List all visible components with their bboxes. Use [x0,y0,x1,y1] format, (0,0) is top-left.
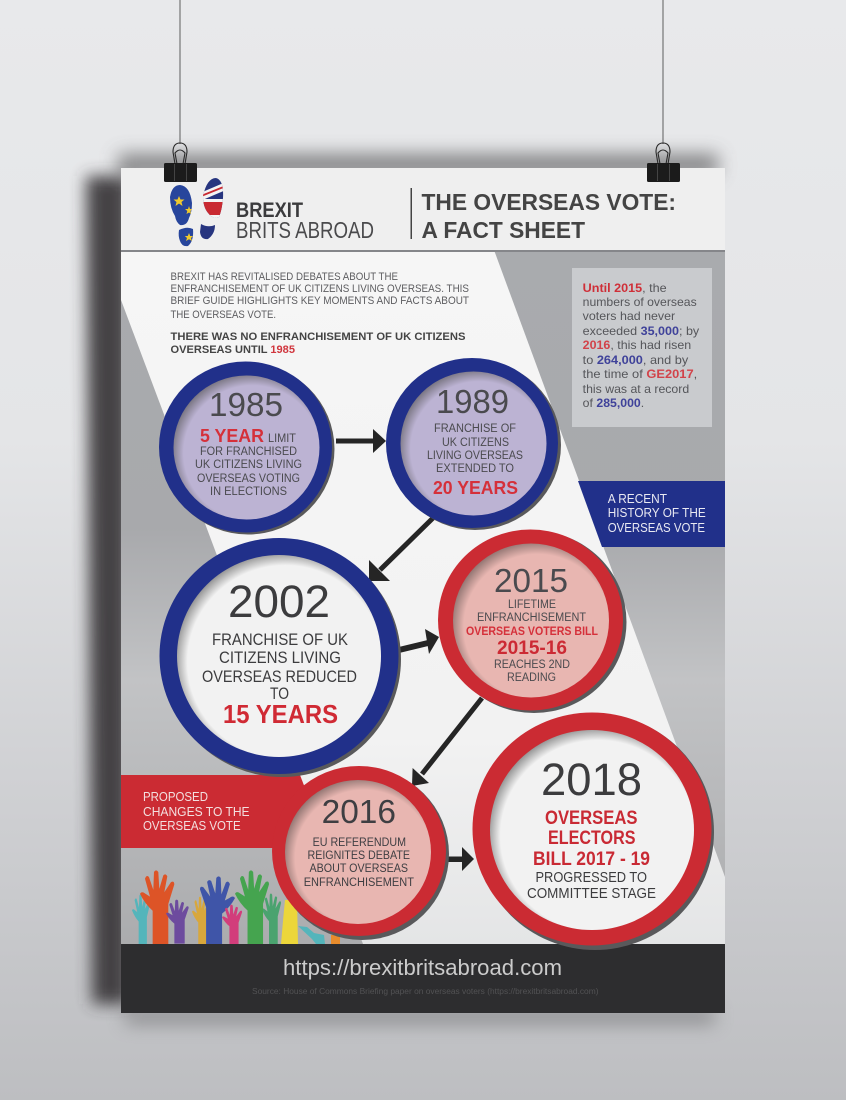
circle: 2016: ABOUT OVERSEAS [310,863,408,875]
circle: 1985: IN ELECTIONS [210,486,287,498]
intro text: BRIEF GUIDE HIGHLIGHTS KEY MOMENTS AND FACTS ABOUT [170,295,469,307]
circle: 2018: ELECTORS [548,828,636,849]
banner: a recent history [578,481,725,547]
circle: 2002 [160,538,401,777]
intro bold statement: OVERSEAS UNTIL 1985 [170,344,295,356]
circle: 2015: 2015-16 [497,638,567,659]
circle: 2018: OVERSEAS [545,808,638,829]
header divider [410,188,412,239]
callout: overseas voter numbers: the time of GE2017 , [583,367,697,381]
circle: 1989: EXTENDED TO [436,463,514,475]
poster body [121,168,725,1013]
circle: 2016: ENFRANCHISEMENT [304,877,414,889]
circle: 2015: 2015 [494,562,568,599]
arrow: 2016 to 2018 [448,847,474,871]
callout: overseas voter numbers: Until 2015, the [583,281,667,295]
logo wordmark: BRITS ABROAD [236,217,374,243]
banner: a recent history: A RECENT [608,492,667,506]
arrow: 1989 to 2002 [369,518,433,581]
icon: left clip [164,143,197,182]
circle: 2018 [472,712,714,950]
title [422,189,676,243]
circle: 2015: LIFETIME [508,599,556,611]
intro text [170,271,469,321]
footer band [121,944,725,1013]
circle: 2018: 2018 [541,754,642,805]
circle: 2002: 15 YEARS [223,699,338,729]
circle: 1989: LIVING OVERSEAS [427,450,523,462]
callout: overseas voter numbers: to 264,000, and by [583,353,688,367]
banner: a recent history: OVERSEAS VOTE [608,521,705,535]
arrow: 2015 to 2016 [412,698,482,786]
title: THE OVERSEAS VOTE: [422,189,676,215]
circle: 2015 [438,530,626,713]
circle: 2018: COMMITTEE STAGE [527,885,656,902]
logo: brexit footprints [170,176,226,246]
circle: 2002: 2002 [228,576,330,627]
circle: 1989 [386,358,561,530]
intro text: ENFRANCHISEMENT OF UK CITIZENS LIVING OVERSEAS. THIS [170,283,469,295]
circle: 1989: FRANCHISE OF [434,423,516,435]
logo wordmark [236,198,374,243]
circle: 1985: UK CITIZENS LIVING [195,459,302,471]
header band [121,168,725,252]
circle: 1985 [159,362,334,534]
circle: 1989: 20 YEARS [433,478,518,498]
intro bold statement [170,331,466,356]
circle: 2002: TO [270,685,289,703]
poster shadow [86,154,718,1024]
circle: 2015: REACHES 2ND [494,659,570,671]
callout: overseas voter numbers: 2016, this had risen [583,338,691,352]
circle: 1985: FOR FRANCHISED [200,446,297,458]
circle: 1985: 1985 [209,386,283,423]
circle: 2002: OVERSEAS REDUCED [202,668,357,686]
circle: 1985: OVERSEAS VOTING [197,473,300,485]
circle: 2016: EU REFERENDUM [313,837,406,849]
circle: 2016: REIGNITES DEBATE [308,850,410,862]
illustration: raised hands [132,870,340,945]
circle: 2016: 2016 [322,793,396,830]
callout: overseas voter numbers: numbers of overseas [583,295,697,309]
banner: proposed changes: PROPOSED [143,790,208,804]
callout: overseas voter numbers: voters had never [583,309,675,323]
circle: 2015: READING [507,672,556,684]
arrow: 1985 to 1989 [336,429,386,453]
title: A FACT SHEET [422,217,585,243]
circle: 2002: FRANCHISE OF UK [212,631,348,649]
circle: 1985: LIMIT [268,433,296,445]
logo wordmark: BREXIT [236,198,303,222]
circle: 1985: 5 YEAR [200,426,264,446]
callout: overseas voter numbers: this was at a record [583,382,689,396]
intro bold statement: THERE WAS NO ENFRANCHISEMENT OF UK CITIZENS [170,331,466,343]
binder clips [164,143,680,182]
banner: proposed changes: CHANGES TO THE [143,805,250,819]
banner: a recent history: HISTORY OF THE [608,506,706,520]
circle: 1989: UK CITIZENS [442,437,509,449]
circle: 2016 [272,766,449,940]
banner: proposed changes: OVERSEAS VOTE [143,819,241,833]
grey background panel [121,250,725,944]
hanging strings [180,0,663,144]
source note: Source: House of Commons Briefing paper on overseas voters (https://brexitbritsabroad.com) [252,987,599,996]
icon: right clip [647,143,680,182]
arrow: 2002 to 2015 [399,629,439,654]
circle: 2015: OVERSEAS VOTERS BILL [466,626,598,638]
website url: https://brexitbritsabroad.com [283,955,562,980]
circle: 1989: 1989 [436,383,509,420]
circle: 2015: ENFRANCHISEMENT [477,612,586,624]
banner: proposed changes [121,775,328,848]
intro text: BREXIT HAS REVITALISED DEBATES ABOUT THE [170,271,398,283]
callout: overseas voter numbers: of 285,000. [583,396,644,410]
white diagonal band [121,250,725,944]
icon: EU footprint [170,185,193,246]
callout: overseas voter numbers [572,268,712,427]
circle: 2002: CITIZENS LIVING [219,649,341,667]
icon: UK footprint [200,178,224,240]
intro text: THE OVERSEAS VOTE. [170,309,276,321]
circle: 2018: PROGRESSED TO [536,869,647,886]
callout: overseas voter numbers: exceeded 35,000; by [583,324,699,338]
circle: 2018: BILL 2017 - 19 [533,849,650,870]
